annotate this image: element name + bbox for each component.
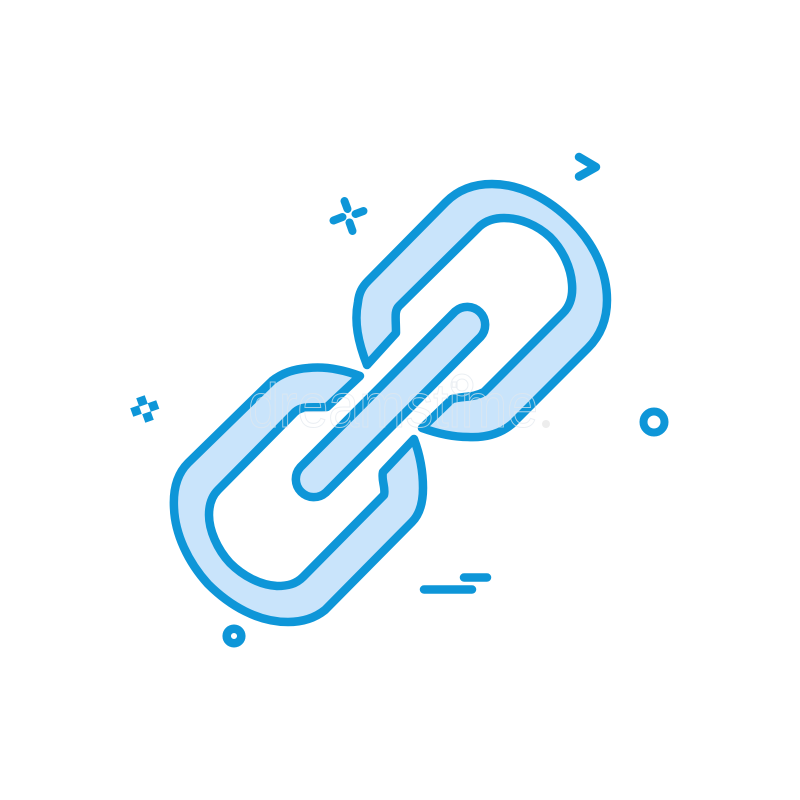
icon: sparkle star [334,201,364,231]
icon: four squares [130,395,159,423]
watermark: dreamstime [248,372,538,441]
icon: chevron arrow [579,157,596,176]
middle link [296,307,485,497]
upper link [356,184,607,437]
icon: large ring [644,412,664,432]
icon: small ring [227,629,241,643]
icon: chain link [174,184,607,622]
icon: dash lines [424,578,487,590]
lower link [174,367,423,622]
